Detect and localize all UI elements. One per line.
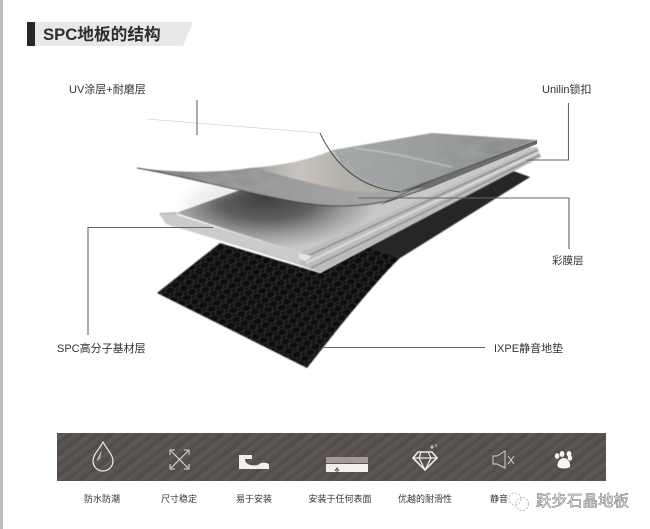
feature labels: 防水防潮 (84, 493, 120, 504)
layer: UV coating curl (147, 119, 400, 192)
leader: UV coating (196, 100, 198, 135)
soft shadow above base (180, 172, 290, 212)
icon: expand arrows (170, 450, 189, 469)
title banner: SPC地板的结构 (43, 25, 161, 44)
layer: SPC base (159, 147, 541, 273)
label: SPC base: SPC高分子基材层 (57, 341, 146, 355)
left page edge strip (0, 0, 3, 529)
watermark: 跃步石晶地板 (536, 492, 629, 510)
label: UV coating: UV涂层+耐磨层 (69, 82, 146, 96)
feature labels: 静音 (490, 493, 508, 504)
label: colour film: 彩膜层 (552, 255, 584, 267)
title banner (27, 22, 193, 46)
layer: film edge right side (380, 140, 537, 205)
icon: muted speaker (493, 451, 514, 468)
icon: diamond (413, 444, 437, 470)
layer: IXPE underlay (157, 170, 530, 368)
icon: click profile (239, 455, 269, 469)
feature labels (84, 493, 508, 504)
leader: SPC base (88, 228, 213, 335)
feature labels: 易于安装 (236, 493, 272, 504)
layer: colour film underside (137, 150, 453, 206)
label: IXPE pad: IXPE静音地垫 (494, 341, 563, 355)
icon: water drop (93, 442, 113, 471)
icon: paw (555, 451, 572, 468)
leader: IXPE pad (322, 346, 485, 348)
leader: colour film (358, 198, 569, 249)
feature labels: 优越的耐滑性 (398, 493, 452, 504)
feature band background (57, 433, 606, 481)
layer: colour film flat surface (333, 133, 537, 192)
layered floor diagram (137, 119, 541, 368)
icon: surface arrow (326, 457, 368, 474)
label: Unilin lock: Unilin锁扣 (542, 82, 592, 96)
feature labels: 安装于任何表面 (308, 493, 372, 504)
leader: Unilin lock (527, 103, 568, 160)
feature labels: 尺寸稳定 (161, 493, 197, 504)
